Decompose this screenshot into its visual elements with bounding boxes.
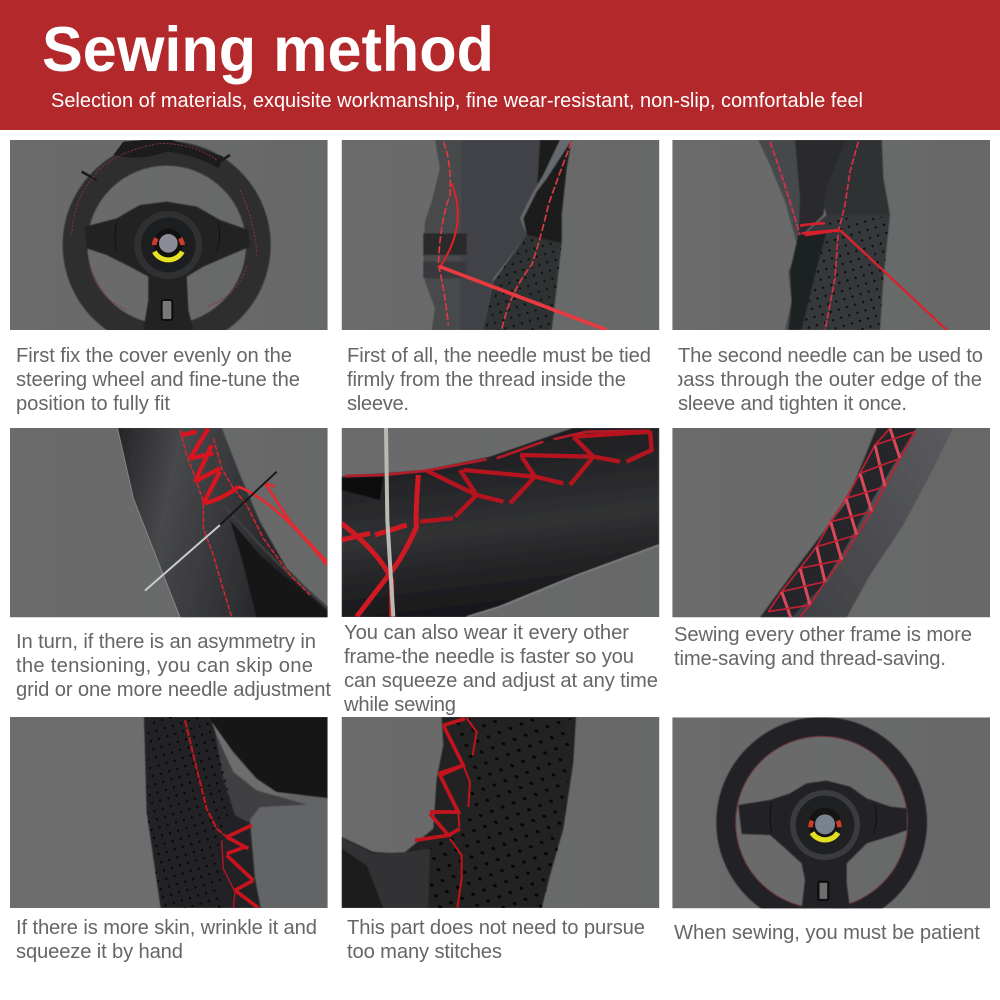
caption: while sewing xyxy=(343,694,456,716)
caption: squeeze it by hand xyxy=(16,941,183,963)
caption: pass through the outer edge of the xyxy=(672,369,982,391)
panel: step 3 second needle xyxy=(672,140,990,415)
photo: perforated leather at spoke junction xyxy=(10,717,328,908)
caption: The second needle can be used to xyxy=(678,345,983,367)
subtitle: Selection of materials, exquisite workmanship, fine wear-resistant, non-slip, comfortable feel xyxy=(51,90,863,112)
photo: sleeve tightened with second needle xyxy=(672,140,990,330)
photo: close-up of red lacing and needle xyxy=(342,428,659,617)
caption: In turn, if there is an asymmetry in xyxy=(16,631,316,653)
caption: If there is more skin, wrinkle it and xyxy=(16,917,317,939)
caption xyxy=(16,631,331,701)
panel: step 4 asymmetry adjustment xyxy=(10,428,331,701)
header banner xyxy=(0,0,1000,130)
caption xyxy=(16,917,317,963)
caption: frame-the needle is faster so you xyxy=(344,646,634,668)
caption: firmly from the thread inside the xyxy=(347,369,626,391)
caption: sleeve and tighten it once. xyxy=(678,393,907,415)
title: Sewing method xyxy=(42,15,494,85)
caption: grid or one more needle adjustment xyxy=(16,679,331,701)
caption xyxy=(347,345,651,415)
caption: the tensioning, you can skip one xyxy=(16,655,313,677)
panel: step 1 fix the cover xyxy=(10,138,328,415)
panel: step 7 wrinkle and squeeze xyxy=(10,717,328,963)
panel: step 9 be patient xyxy=(672,717,990,944)
caption: When sewing, you must be patient xyxy=(674,922,980,944)
caption xyxy=(672,345,983,415)
caption: time-saving and thread-saving. xyxy=(674,648,946,670)
caption xyxy=(343,622,658,716)
caption: can squeeze and adjust at any time xyxy=(344,670,658,692)
caption xyxy=(674,624,972,670)
caption: position to fully fit xyxy=(16,393,170,415)
caption xyxy=(16,345,300,415)
panel: step 8 fewer stitches xyxy=(342,717,659,963)
panel: step 6 time and thread saving xyxy=(672,428,990,670)
panel: step 2 tie the needle xyxy=(342,140,659,415)
caption: too many stitches xyxy=(347,941,502,963)
caption: You can also wear it every other xyxy=(344,622,629,644)
photo: finished steering wheel xyxy=(672,717,990,918)
photo: perforated leather with red lacing xyxy=(342,717,659,908)
photo: finished lattice stitching xyxy=(672,428,990,625)
photo: steering wheel with loose cover xyxy=(10,138,328,337)
caption: sleeve. xyxy=(347,393,409,415)
caption: First fix the cover evenly on the xyxy=(16,345,292,367)
photo: needle through stitched leather xyxy=(10,428,328,617)
caption: Sewing every other frame is more xyxy=(674,624,972,646)
caption: steering wheel and fine-tune the xyxy=(16,369,300,391)
caption: First of all, the needle must be tied xyxy=(347,345,651,367)
photo: sleeve with red thread tied xyxy=(342,140,659,330)
caption xyxy=(347,917,645,963)
caption: This part does not need to pursue xyxy=(347,917,645,939)
panel: step 5 every other frame xyxy=(342,428,659,716)
